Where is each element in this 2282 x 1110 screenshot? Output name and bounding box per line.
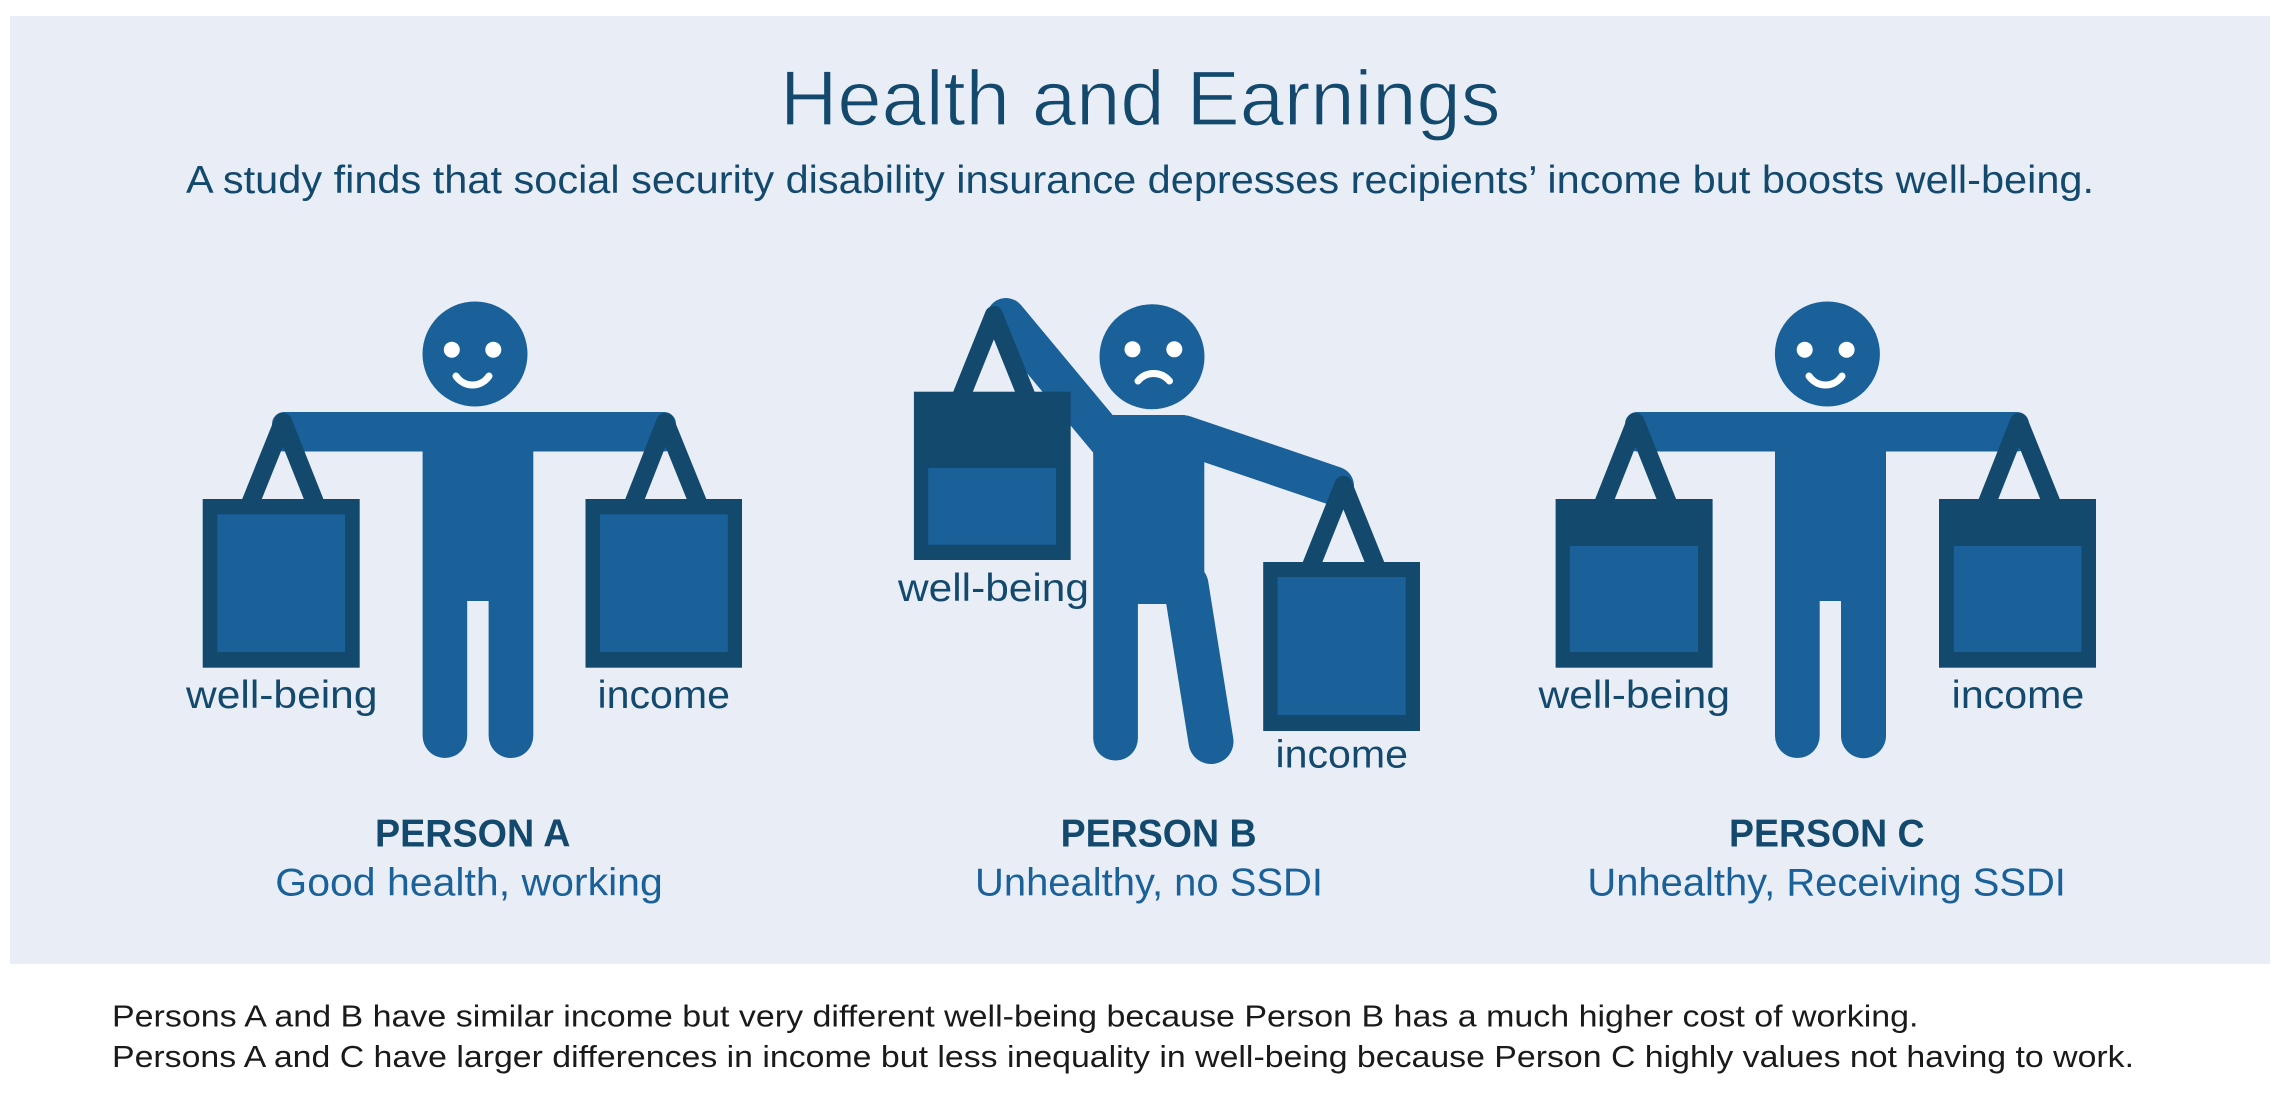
bag: person C income: [1939, 422, 2096, 668]
bag: person C well-being: [1556, 422, 1713, 668]
figure: person C: [1537, 302, 2096, 758]
caption: person B name: PERSON B: [1061, 812, 1257, 856]
title: Health and Earnings: [780, 54, 1500, 142]
bag: person A well-being: [203, 422, 360, 668]
label: well-being: well-being: [185, 674, 378, 717]
bag: person B income: [1263, 485, 1420, 731]
bag: person B well-being: [914, 315, 1071, 560]
figure: person B: [897, 304, 1420, 777]
caption: person C status: Unhealthy, Receiving SSDI: [1587, 862, 2066, 905]
footnote text: [112, 999, 2134, 1074]
person A body: [272, 412, 676, 758]
person C body: [1625, 412, 2029, 758]
person C head, smiling: [1775, 302, 1880, 406]
person B head, frowning: [1100, 304, 1204, 409]
label: income: income: [1276, 734, 1408, 777]
footnote line 1: Persons A and B have similar income but very different well-being because Person B has a much higher cost of working.: [112, 999, 1918, 1034]
caption: person A name: PERSON A: [375, 812, 570, 856]
subtitle: A study finds that social security disability insurance depresses recipients’ income but boosts well-being.: [186, 159, 2094, 202]
label: well-being: well-being: [897, 567, 1089, 610]
label: well-being: well-being: [1537, 674, 1730, 717]
label: income: income: [598, 674, 730, 717]
label: income: income: [1952, 674, 2084, 717]
caption: person B status: Unhealthy, no SSDI: [975, 862, 1323, 905]
figure: person A: [185, 302, 742, 758]
caption: person A status: Good health, working: [275, 862, 663, 905]
person B body: [1006, 318, 1334, 761]
bag: person A income: [586, 422, 742, 668]
person A head, smiling: [422, 302, 528, 406]
caption: person C name: PERSON C: [1729, 812, 1925, 856]
footnote line 2: Persons A and C have larger differences in income but less inequality in well-being because Person C highly values not having to work.: [112, 1039, 2134, 1074]
